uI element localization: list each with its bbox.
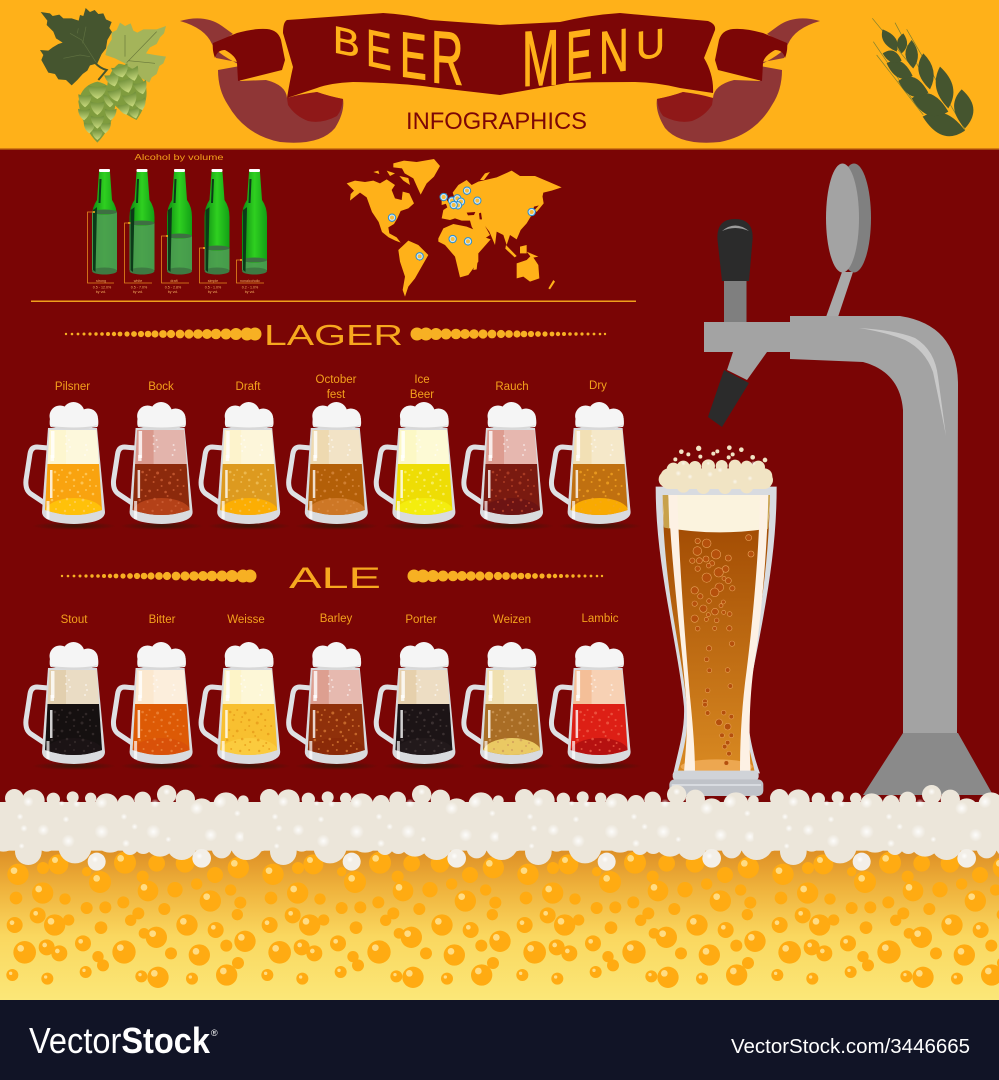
bottle: draft: 0.5 - 2.8% xyxy=(165,286,182,290)
foam on top xyxy=(659,445,773,494)
mug: Pilsner: Pilsner xyxy=(55,381,90,393)
title: BEER MENU: R xyxy=(431,16,463,101)
bottle: nonalcoholic: nonalcoholic xyxy=(240,279,260,283)
glass outline xyxy=(656,487,777,773)
mug: Ice Beer xyxy=(376,374,466,530)
title: BEER MENU: E xyxy=(566,16,592,97)
lager mugs xyxy=(26,374,642,530)
bottle: nonalcoholic: by vol. xyxy=(245,290,255,294)
header band xyxy=(0,0,999,150)
title: BEER MENU: E xyxy=(366,18,392,82)
mug: Bitter xyxy=(113,614,204,770)
tap: column xyxy=(790,316,993,795)
mug: Porter: Porter xyxy=(405,614,437,626)
ale mugs xyxy=(26,613,642,770)
icon: hop leaves and cones xyxy=(40,8,166,143)
mug: Ice Beer: Beer xyxy=(410,389,434,401)
mug: Stout xyxy=(26,614,116,770)
bottle: simple: simple xyxy=(208,279,218,283)
mug: Draft xyxy=(201,381,291,530)
icon: wheat ear xyxy=(872,18,973,136)
mug: Pilsner xyxy=(26,381,116,530)
bottle: nonalcoholic xyxy=(236,169,267,294)
mug: Weisse xyxy=(201,614,291,770)
world map with pins xyxy=(347,159,562,297)
mug: Rauch: Rauch xyxy=(495,381,529,393)
bottle: simple: 0.5 - 1.0% xyxy=(205,286,222,290)
bottle: white: 0.5 - 7.0% xyxy=(131,286,148,290)
watermark: VectorStock logo: VectorStock xyxy=(29,1020,211,1061)
map: continents xyxy=(347,159,562,297)
mug: Porter xyxy=(376,614,466,770)
mug: Ice Beer: Ice xyxy=(414,374,430,386)
subtitle: INFOGRAPHICS: INFOGRAPHICS xyxy=(406,108,587,135)
mug: Dry xyxy=(551,380,642,530)
heading: LAGER: LAGER xyxy=(264,320,403,352)
beer head xyxy=(663,495,770,532)
chart title: Alcohol by volume xyxy=(134,153,224,162)
bottom highlight xyxy=(681,759,753,774)
title: BEER MENU: N xyxy=(599,15,629,87)
bottle: strong: 0.5 - 12.0% xyxy=(93,286,112,290)
mug: Weizen xyxy=(464,614,554,770)
mug: Stout: Stout xyxy=(61,614,88,626)
bottle: strong xyxy=(88,169,117,294)
rising bubbles xyxy=(690,535,754,765)
bottle: strong: strong xyxy=(96,279,106,283)
bottle: white: by vol. xyxy=(133,290,143,294)
mug: Dry: Dry xyxy=(589,380,607,392)
mug: Weizen: Weizen xyxy=(493,614,531,626)
mug: October fest: fest xyxy=(327,389,346,401)
bottle: draft: draft xyxy=(170,279,178,283)
ribbon banner xyxy=(180,13,820,143)
watermark: image id: VectorStock.com/3446665 xyxy=(731,1036,970,1058)
ribbon: centre xyxy=(283,13,715,98)
tap: round handle xyxy=(826,164,871,317)
tap: black lever xyxy=(717,219,753,322)
divider line xyxy=(31,300,636,302)
ribbon: right tail xyxy=(657,18,820,143)
bottle: simple: by vol. xyxy=(208,290,218,294)
pint glass of beer xyxy=(656,445,777,796)
beer tap xyxy=(704,164,993,795)
mug: Lambic xyxy=(551,613,642,770)
heading: LAGER xyxy=(65,320,606,352)
watermark: VectorStock logo: ® xyxy=(211,1028,218,1038)
heading: ALE: ALE xyxy=(289,562,381,595)
mug: Barley: Barley xyxy=(320,613,353,625)
bottle: white xyxy=(124,169,154,294)
bottle: simple xyxy=(200,169,230,294)
beer band with bubbles xyxy=(0,840,999,1000)
glass highlights xyxy=(668,495,768,772)
bottle: white: white xyxy=(134,279,142,283)
heading: ALE xyxy=(61,562,603,595)
footer bar xyxy=(0,1000,999,1080)
mug: October fest xyxy=(289,374,379,530)
mug: October fest: October xyxy=(316,374,357,386)
ribbon: left tail xyxy=(180,18,343,143)
chart: alcohol by volume bottles xyxy=(88,153,267,294)
bottle: nonalcoholic: 0.2 - 1.0% xyxy=(242,286,259,290)
title: BEER MENU xyxy=(333,14,665,103)
beer xyxy=(663,495,770,773)
title: BEER MENU: M xyxy=(522,14,559,103)
bottle: strong: by vol. xyxy=(96,290,106,294)
mug: Draft: Draft xyxy=(236,381,261,393)
mug: Rauch xyxy=(464,381,554,530)
title: BEER MENU: U xyxy=(636,20,665,69)
map pins xyxy=(388,187,535,261)
mug: Bitter: Bitter xyxy=(149,614,176,626)
title: BEER MENU: B xyxy=(333,18,360,66)
bottle: draft: by vol. xyxy=(168,290,178,294)
mug: Bock xyxy=(113,381,204,530)
bottle: draft xyxy=(162,169,192,294)
mug: Lambic: Lambic xyxy=(581,613,619,625)
title: BEER MENU: E xyxy=(400,20,427,94)
glass base xyxy=(669,771,763,796)
mug: Barley xyxy=(289,613,379,770)
mug: Bock: Bock xyxy=(148,381,174,393)
foam band xyxy=(0,785,999,871)
mug: Weisse: Weisse xyxy=(227,614,265,626)
tap: spout xyxy=(704,322,790,427)
